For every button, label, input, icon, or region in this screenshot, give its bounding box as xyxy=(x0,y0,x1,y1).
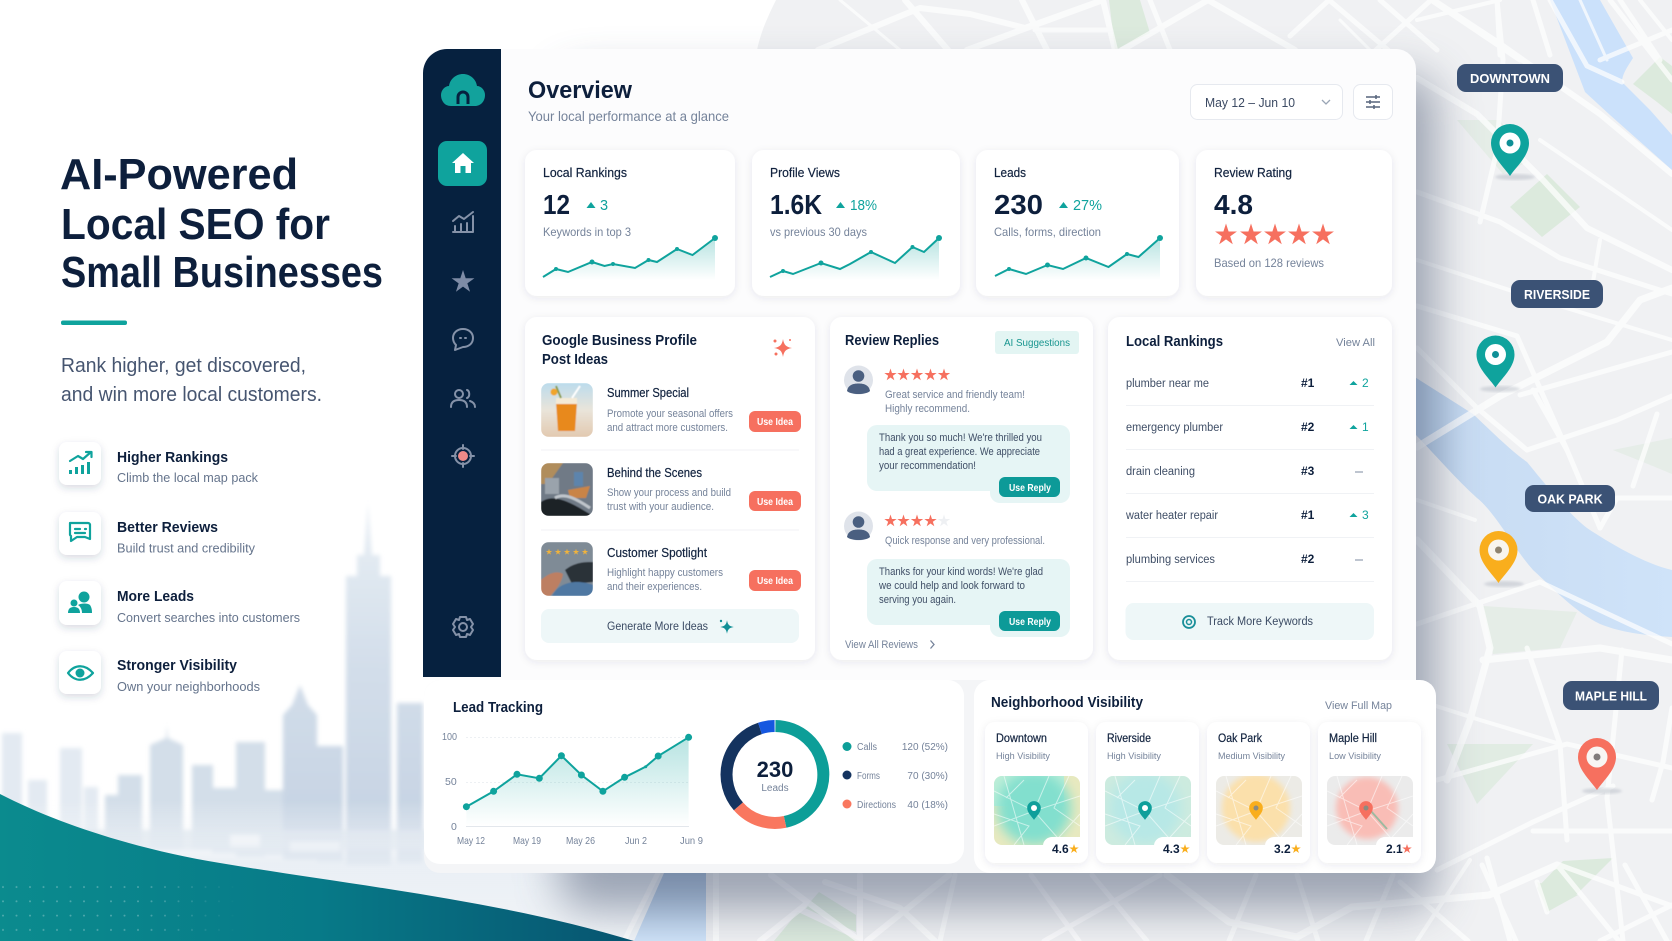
neighborhood card: maple hill: 2.1 xyxy=(1386,842,1403,856)
reply bubble: your recommendation! xyxy=(879,460,976,472)
button: use reply xyxy=(999,477,1060,497)
left column: title: Small Businesses xyxy=(61,248,383,297)
heat map xyxy=(994,771,1080,845)
donut chart: 230 xyxy=(757,757,793,782)
reply bubble: we could help and look forward to xyxy=(878,580,1025,592)
neighborhood card: downtown: High Visibility xyxy=(996,751,1050,762)
KPI card: profile views: 18% xyxy=(850,198,877,214)
left column: title: Local SEO for xyxy=(61,200,330,249)
ranking rows: #1 xyxy=(1301,508,1315,522)
post idea: customer spotlight: and their experiences. xyxy=(607,581,702,593)
nav: target xyxy=(452,445,474,467)
panel: local rankings xyxy=(1108,317,1392,660)
line chart: May 12 xyxy=(457,835,485,847)
panel: neighborhood visibility xyxy=(974,680,1436,873)
review stars xyxy=(884,514,950,526)
tag: AI suggestions: AI Suggestions xyxy=(1004,337,1070,349)
date range picker: May 12 – Jun 10 xyxy=(1205,95,1295,110)
road network xyxy=(624,0,1672,941)
map marker: oak park xyxy=(1480,485,1615,587)
donut legend: Forms xyxy=(857,771,880,782)
map marker: downtown: DOWNTOWN xyxy=(1470,71,1550,86)
river: middle xyxy=(1380,355,1672,637)
button: generate more ideas: Generate More Ideas xyxy=(607,621,708,633)
river: bottom channel xyxy=(634,873,706,941)
reply bubble: had a great experience. We appreciate xyxy=(879,446,1040,458)
ranking rows: #1 xyxy=(1301,376,1315,390)
donut legend: 120 (52%) xyxy=(902,742,948,753)
panel: review replies xyxy=(830,317,1093,660)
overview header: Your local performance at a glance xyxy=(528,108,729,124)
ranking rows: water heater repair xyxy=(1125,510,1218,522)
button: use idea xyxy=(749,570,801,591)
neighborhood card: maple hill: Maple Hill xyxy=(1329,733,1377,745)
button: track more keywords xyxy=(1126,603,1374,640)
neighborhood card: maple hill: Low Visibility xyxy=(1329,751,1381,762)
heat map xyxy=(1105,772,1191,845)
donut legend xyxy=(842,742,948,811)
neighborhood card: downtown: 4.6 xyxy=(1052,842,1069,856)
panel: google business profile post ideas: Google Business Profile xyxy=(542,332,697,349)
donut legend: 70 (30%) xyxy=(907,771,948,782)
thumbnail: iced drink xyxy=(541,383,593,437)
sparkline xyxy=(995,235,1163,280)
subtitle xyxy=(61,355,322,406)
donut legend: 40 (18%) xyxy=(907,800,948,811)
sparkline xyxy=(770,235,942,280)
KPI card: profile views: vs previous 30 days xyxy=(770,225,867,239)
button: use reply: Use Reply xyxy=(1009,616,1051,628)
button: use idea xyxy=(749,491,801,511)
button: use idea xyxy=(749,411,801,432)
subtitle: and win more local customers. xyxy=(61,384,322,406)
nav: users xyxy=(451,390,475,407)
panel: lead tracking: Lead Tracking xyxy=(453,699,543,716)
post idea: summer special: and attract more customers. xyxy=(607,422,728,434)
dashboard drop shadow on map xyxy=(560,75,1436,910)
ranking rows: plumbing services xyxy=(1126,554,1215,566)
panel: google business profile post ideas xyxy=(525,317,815,660)
neighborhood card: riverside xyxy=(1096,722,1199,863)
feature: more leads: Convert searches into customers xyxy=(117,610,300,625)
ranking rows: emergency plumber xyxy=(1126,422,1223,434)
post idea: behind the scenes xyxy=(541,463,801,516)
KPI card: profile views: 1.6K xyxy=(770,189,822,220)
city skyline background xyxy=(0,503,700,865)
reply bubble: Thanks for your kind words! We're glad xyxy=(879,566,1043,578)
donut chart xyxy=(727,726,823,823)
panel: local rankings: Local Rankings xyxy=(1126,333,1223,350)
post idea: summer special: Promote your seasonal offers xyxy=(607,408,733,420)
button: track more keywords: Track More Keywords xyxy=(1207,616,1313,628)
icon: speech bubbles xyxy=(70,523,90,541)
post idea: customer spotlight xyxy=(541,542,801,596)
panel: review replies: Quick response and very professional. xyxy=(885,535,1045,547)
ranking rows: 1 xyxy=(1362,420,1369,434)
avatar xyxy=(844,512,873,540)
ranking rows xyxy=(1125,376,1369,566)
post idea: summer special xyxy=(541,383,801,437)
overview header: Overview xyxy=(528,77,632,104)
pin xyxy=(1491,124,1535,180)
filter button xyxy=(1354,84,1392,120)
heat map xyxy=(1216,774,1302,845)
icon: people xyxy=(68,592,92,613)
KPI card: leads xyxy=(976,150,1179,296)
feature: better reviews xyxy=(59,512,255,556)
line chart: Jun 2 xyxy=(625,835,647,847)
button: use idea: Use Idea xyxy=(757,496,793,508)
feature: higher rankings: Climb the local map pack xyxy=(117,470,258,485)
reply bubble: Thank you so much! We're thrilled you xyxy=(879,432,1042,444)
KPI card: review rating: 4.8 xyxy=(1214,189,1253,220)
nav: settings xyxy=(453,617,473,637)
KPI card: local rankings: Keywords in top 3 xyxy=(543,225,631,239)
feature: better reviews: Build trust and credibility xyxy=(117,540,255,556)
sparkline xyxy=(543,235,718,280)
neighborhood card: riverside: High Visibility xyxy=(1107,751,1161,762)
neighborhood card: oak park: 3.2 xyxy=(1274,842,1291,856)
KPI card: local rankings xyxy=(525,150,735,296)
button: use reply: Use Reply xyxy=(1009,482,1051,494)
feature: stronger visibility: Stronger Visibility xyxy=(117,657,238,674)
pin xyxy=(1476,336,1520,392)
link: view all reviews: View All Reviews xyxy=(845,639,918,651)
thumbnail: workshop xyxy=(541,463,593,516)
button: use idea: Use Idea xyxy=(757,575,793,587)
river: upper right xyxy=(1550,0,1672,170)
line chart: May 26 xyxy=(566,835,595,847)
feature: better reviews: Better Reviews xyxy=(117,519,218,536)
map marker: downtown xyxy=(1457,64,1563,180)
neighborhood card: oak park: Medium Visibility xyxy=(1218,751,1285,762)
KPI card: review rating: Review Rating xyxy=(1214,165,1292,180)
left column: title: AI-Powered xyxy=(60,150,298,199)
map marker: oak park: OAK PARK xyxy=(1538,492,1603,506)
neighborhood card: riverside: Riverside xyxy=(1107,733,1151,745)
line chart: 0 xyxy=(451,821,457,833)
neighborhood card: oak park xyxy=(1207,722,1310,863)
accent rule xyxy=(61,320,127,325)
feature: higher rankings xyxy=(59,442,258,485)
line chart: 50 xyxy=(445,776,457,788)
nav: chat xyxy=(453,329,473,350)
park blocks xyxy=(774,0,1672,941)
panel: review replies: Review Replies xyxy=(845,332,939,349)
line chart: 100 xyxy=(442,731,457,743)
KPI card: review rating: Based on 128 reviews xyxy=(1214,256,1324,270)
KPI card: leads: 230 xyxy=(994,189,1043,220)
icon: eye xyxy=(68,666,93,680)
neighborhood card: downtown xyxy=(985,722,1088,863)
KPI card: local rankings: 12 xyxy=(543,189,570,220)
neighborhood card: oak park: Oak Park xyxy=(1218,733,1262,745)
panel: neighborhood visibility: View Full Map xyxy=(1325,700,1392,712)
map marker: maple hill xyxy=(1563,681,1659,794)
line chart: May 19 xyxy=(513,835,541,847)
post idea: customer spotlight: Highlight happy customers xyxy=(607,567,723,579)
date range picker xyxy=(1190,84,1342,120)
button: use idea: Use Idea xyxy=(757,416,793,428)
panel: neighborhood visibility: Neighborhood Visibility xyxy=(991,694,1144,711)
feature: higher rankings: Higher Rankings xyxy=(117,449,228,466)
map marker: riverside xyxy=(1476,280,1603,392)
ranking rows: 3 xyxy=(1362,508,1369,522)
heat map xyxy=(1327,776,1413,845)
nav: home xyxy=(438,141,487,186)
KPI card: local rankings: 3 xyxy=(600,198,608,214)
ranking rows: 2 xyxy=(1362,376,1369,390)
panel: review replies: Great service and friendly team! xyxy=(885,389,1025,401)
icon: growth chart xyxy=(69,452,92,474)
map marker: maple hill: MAPLE HILL xyxy=(1575,688,1647,704)
panel: google business profile post ideas: Post Ideas xyxy=(542,351,608,368)
KPI card: leads: Calls, forms, direction xyxy=(994,225,1101,239)
dashboard main panel xyxy=(423,49,1416,680)
feature: more leads xyxy=(59,581,300,625)
overview header xyxy=(528,77,729,124)
thumbnail: customer hand with stars xyxy=(541,542,593,596)
post idea: behind the scenes: Behind the Scenes xyxy=(607,466,702,480)
ranking rows: #2 xyxy=(1301,420,1315,434)
post idea: behind the scenes: Show your process and build xyxy=(607,487,731,499)
KPI card: local rankings: Local Rankings xyxy=(543,165,627,180)
button: generate more ideas xyxy=(541,609,799,643)
reply bubble xyxy=(867,425,1070,503)
KPI card: profile views xyxy=(752,150,960,296)
line chart: Jun 9 xyxy=(680,835,703,847)
avatar xyxy=(844,366,873,394)
reply bubble xyxy=(867,559,1070,637)
teal wave xyxy=(0,794,634,941)
button: use reply xyxy=(999,611,1060,631)
line chart xyxy=(442,731,703,847)
panel: review replies: Highly recommend. xyxy=(885,403,970,415)
donut legend: Directions xyxy=(857,800,896,811)
left column: title xyxy=(60,150,383,297)
subtitle: Rank higher, get discovered, xyxy=(61,355,306,377)
star rating xyxy=(1215,224,1334,244)
nav: analytics xyxy=(453,212,473,232)
neighborhood card: maple hill xyxy=(1318,722,1421,863)
tag: AI suggestions xyxy=(995,331,1079,354)
feature: more leads: More Leads xyxy=(117,588,194,605)
ranking rows: drain cleaning xyxy=(1126,466,1195,478)
KPI card: profile views: Profile Views xyxy=(770,165,840,180)
icon: coral sparkle xyxy=(774,339,792,357)
review stars xyxy=(884,368,950,380)
post idea: behind the scenes: trust with your audience. xyxy=(607,501,714,513)
nav: star xyxy=(452,270,474,292)
feature: stronger visibility: Own your neighborhoods xyxy=(117,679,260,694)
donut chart: Leads xyxy=(761,783,789,794)
panel: local rankings: View All xyxy=(1336,337,1375,349)
post idea: customer spotlight: Customer Spotlight xyxy=(607,546,707,560)
KPI card: leads: Leads xyxy=(994,165,1026,180)
ranking rows: #3 xyxy=(1301,464,1315,478)
icon: cloud logo xyxy=(441,74,485,106)
neighborhood card: riverside: 4.3 xyxy=(1163,842,1180,856)
base fog over skyline xyxy=(0,800,720,941)
KPI card: leads: 27% xyxy=(1073,198,1102,214)
ranking rows: plumber near me xyxy=(1126,378,1209,390)
map marker: riverside: RIVERSIDE xyxy=(1524,287,1590,302)
post idea: summer special: Summer Special xyxy=(607,386,689,400)
sidebar xyxy=(423,49,501,677)
reply bubble: serving you again. xyxy=(879,594,956,606)
pin xyxy=(1480,531,1524,587)
street map background xyxy=(624,0,1672,941)
pin xyxy=(1578,738,1622,794)
neighborhood card: downtown: Downtown xyxy=(996,733,1047,745)
panel: lead tracking xyxy=(424,680,990,873)
ranking rows: #2 xyxy=(1301,552,1315,566)
KPI card: review rating xyxy=(1196,150,1392,296)
donut legend: Calls xyxy=(857,742,877,753)
feature: stronger visibility xyxy=(59,651,260,694)
